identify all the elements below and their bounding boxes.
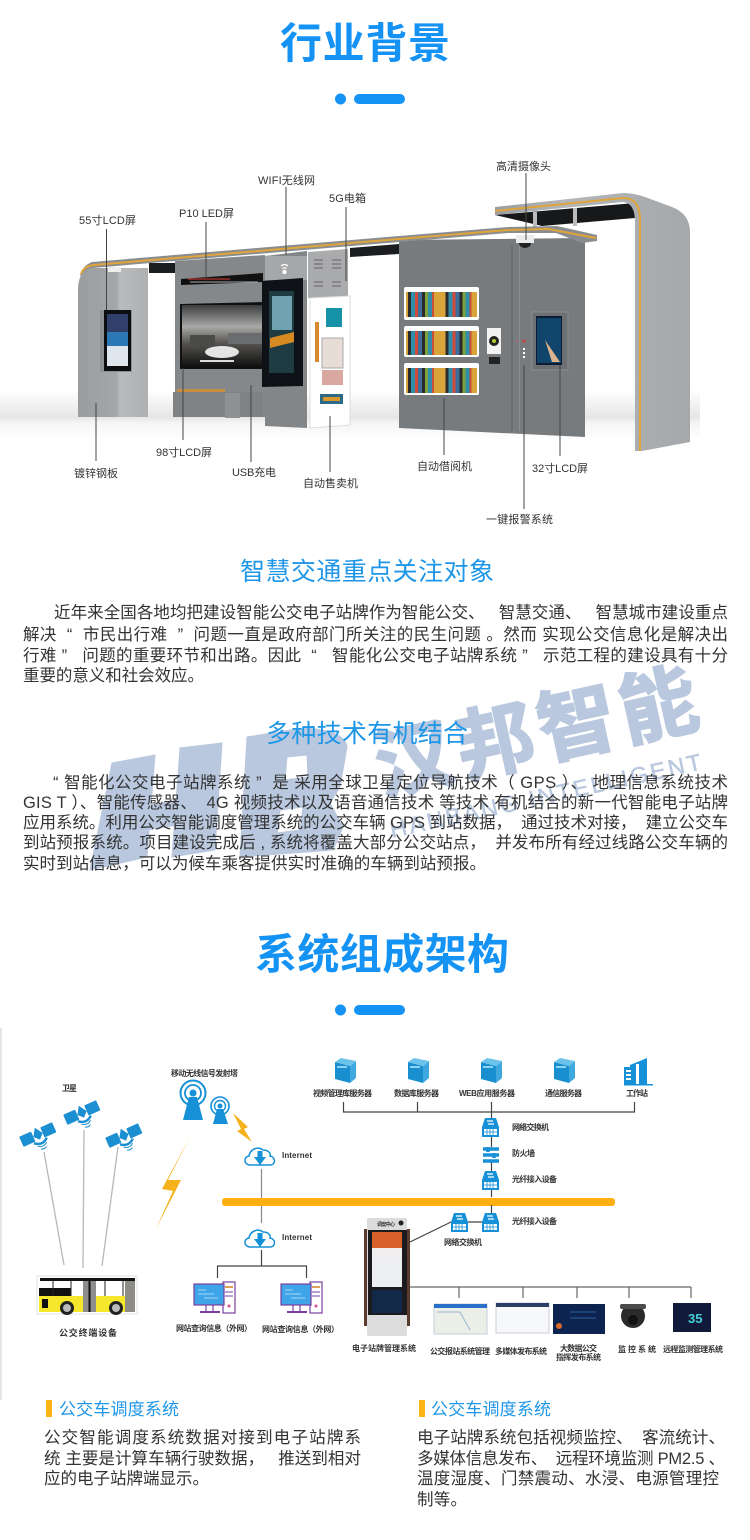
callout: 自动借阅机: 自动借阅机: [417, 459, 472, 473]
lightning bolts: [156, 1113, 252, 1229]
icon: workstation: [624, 1058, 653, 1086]
bench: [173, 389, 263, 418]
callout: 32寸LCD屏: [532, 365, 588, 475]
label: 工作站: 工作站: [626, 1088, 648, 1098]
text block: paragraph 1: 重要的意义和社会效应。: [23, 666, 204, 685]
portrait LCD: [262, 278, 303, 387]
description: 多媒体信息发布、 远程环境监测 PM2.5 、: [417, 1449, 725, 1468]
description: 电子站牌系统包括视频监控、 客流统计、: [417, 1428, 725, 1447]
callout: WIFI无线网: [258, 173, 315, 255]
shelter callouts: [74, 159, 588, 526]
callout: 98寸LCD屏: 98寸LCD屏: [156, 445, 212, 459]
text block: paragraph 2: 实时到站信息，可以为候车乘客提供实时准确的车辆到站预报。: [23, 854, 486, 873]
title: 系统组成架构: 系统组成架构: [255, 931, 509, 978]
alarm buttons: [516, 340, 526, 358]
callout: USB充电: USB充电: [232, 465, 276, 479]
callout: 98寸LCD屏: [156, 368, 212, 459]
roof undersides: [149, 244, 399, 273]
text block: paragraph 2: GIS T ）、智能传感器、 4G 视频技术以及语音通信技术 等技术 有机结合的新一代智能电子站牌: [23, 793, 728, 812]
callout: 5G电箱: [329, 191, 366, 281]
internet cloud 1: [245, 1148, 312, 1165]
callout: 高清摄像头: 高清摄像头: [496, 159, 551, 173]
fibre access device lower: [482, 1213, 557, 1232]
callout: 55寸LCD屏: 55寸LCD屏: [79, 213, 136, 227]
description: [44, 1428, 361, 1488]
subsystem labels: 指挥发布系统: [556, 1352, 601, 1362]
P10 LED strip: [181, 273, 263, 285]
servers: 视频管理库服务器: [313, 1088, 372, 1098]
subsystem labels: 公交报站系统管理: [430, 1346, 490, 1356]
signal towers: [180, 1080, 229, 1124]
callout: 32寸LCD屏: 32寸LCD屏: [532, 461, 588, 475]
kiosk subsystem wiring: [410, 1287, 691, 1298]
screen: multimedia publishing: [496, 1303, 549, 1333]
accent bar: [419, 1400, 425, 1417]
floor reflection: [0, 390, 700, 440]
description: 温度湿度、门禁震动、水浸、电源管理控: [417, 1469, 719, 1488]
title decoration: [335, 1004, 405, 1016]
servers: 通信服务器: [545, 1088, 582, 1098]
watermark: [90, 655, 706, 870]
screen: big data: [553, 1304, 605, 1334]
panel: right dispatch system: [417, 1400, 725, 1509]
computers: 网站查询信息（外网）: [262, 1324, 339, 1334]
subsystem labels: 多媒体发布系统: [495, 1346, 547, 1356]
callout: 自动售卖机: [303, 416, 358, 490]
computers: 网站查询信息（外网）: [176, 1323, 252, 1333]
electronic stop sign kiosk: 调度中心: [377, 1221, 395, 1228]
55 inch LCD: [100, 310, 132, 372]
accent bar: [46, 1400, 52, 1417]
QR panel: [487, 328, 501, 364]
heading: 公交车调度系统: [431, 1400, 551, 1419]
text block: paragraph 2: 到站预报系统。项目建设完成后 , 系统将覆盖大部分公交站点， 并发布所有经过线路公交车辆的: [23, 833, 728, 852]
text block: paragraph 2: “ 智能化公交电子站牌系统 ” 是 采用全球卫星定位导航技术（ GPS ）、 地理信息系统技术: [53, 773, 728, 792]
backbone bar: [222, 1198, 615, 1206]
network switch lower: [410, 1213, 482, 1247]
network switch: 网络交换机: [512, 1122, 549, 1132]
callout: 自动售卖机: 自动售卖机: [303, 476, 358, 490]
callout: 镀锌钢板: [74, 403, 118, 480]
fibre access device upper: [482, 1171, 557, 1190]
subsystem labels: 监控系统: [618, 1344, 656, 1354]
bus shelter illustration: [0, 193, 700, 451]
callout: 55寸LCD屏: [79, 213, 136, 310]
electronic stop sign kiosk: [364, 1218, 410, 1336]
text block: paragraph 2: [23, 773, 728, 873]
subsystem labels: 电子站牌管理系统: [352, 1343, 416, 1353]
right block: book borrowing machine: [399, 238, 585, 437]
servers: [313, 1058, 582, 1098]
center column: [262, 251, 307, 428]
servers: WEB应用服务器: [459, 1088, 515, 1098]
description: 统 主要是计算车辆行驶数据， 推送到相对: [44, 1449, 361, 1468]
description: 应的电子站牌端显示。: [44, 1469, 209, 1488]
description: 制等。: [417, 1490, 467, 1509]
screen: remote monitoring: [673, 1303, 711, 1332]
screen: remote monitoring: 35: [688, 1311, 702, 1326]
5G box: [308, 249, 348, 298]
callout: WIFI无线网: WIFI无线网: [258, 173, 315, 187]
screen: bus station management: [434, 1304, 487, 1334]
bus: [37, 1276, 137, 1315]
book shelves: [404, 287, 479, 395]
panel: left dispatch system: [44, 1400, 361, 1488]
network switch: [482, 1118, 549, 1137]
text block: paragraph 1: [23, 603, 728, 685]
watermark: 汉邦智能: [367, 655, 706, 812]
text block: paragraph 1: 解决 “ 市民出行难 ” 问题一直是政府部门所关注的民生问题 。然而 实现公交信息化是解决出: [23, 625, 728, 644]
heading: 智慧交通重点关注对象: 智慧交通重点关注对象: [240, 558, 494, 586]
subsystem labels: 大数据公交: [560, 1343, 597, 1353]
description: [417, 1428, 725, 1509]
wifi icon: [281, 264, 288, 274]
servers: 数据库服务器: [394, 1088, 439, 1098]
left camera: [108, 267, 121, 272]
callout: USB充电: [232, 385, 276, 479]
fibre access device lower: 光纤接入设备: [512, 1216, 557, 1226]
callout: P10 LED屏: [179, 207, 234, 278]
callout: 自动借阅机: [417, 398, 472, 473]
callout: 5G电箱: 5G电箱: [329, 191, 366, 205]
fibre access device upper: 光纤接入设备: [512, 1174, 557, 1184]
internet cloud 2: [245, 1230, 312, 1247]
subsystem labels: 远程监测管理系统: [663, 1344, 723, 1354]
callout: 镀锌钢板: 镀锌钢板: [74, 466, 118, 480]
server tree wiring: [344, 1102, 634, 1213]
satellites: [18, 1084, 147, 1268]
camera: [516, 235, 534, 248]
text block: paragraph 2: 应用系统。利用公交智能调度管理系统的公交车辆 GPS 到站数据， 通过技术对接， 建立公交车: [23, 813, 728, 832]
satellites: 卫星: [62, 1084, 77, 1093]
label: 公交终端设备: 公交终端设备: [59, 1327, 117, 1338]
wiring left: [260, 1169, 262, 1223]
title decoration: [335, 94, 405, 104]
rear panel: [175, 255, 265, 417]
description: 公交智能调度系统数据对接到电子站牌系: [44, 1428, 361, 1447]
icon: dome camera: [620, 1304, 646, 1328]
callout: 高清摄像头: [496, 159, 551, 240]
subsystem labels: [352, 1343, 723, 1362]
text block: paragraph 1: 近年来全国各地均把建设智能公交电子站牌作为智能公交、 智慧交通、 智慧城市建设重点: [54, 603, 728, 622]
label: 移动无线信号发射塔: 移动无线信号发射塔: [171, 1068, 238, 1078]
firewall: 防火墙: [512, 1148, 535, 1158]
internet cloud 1: Internet: [282, 1151, 312, 1160]
98 inch LCD: [180, 302, 263, 369]
title: 行业背景: 行业背景: [280, 20, 450, 67]
callout: 一键报警系统: 一键报警系统: [486, 512, 553, 526]
main roof: [80, 226, 597, 276]
heading: 多种技术有机结合: 多种技术有机结合: [266, 720, 468, 748]
firewall: [483, 1147, 535, 1161]
system architecture diagram: [1, 1028, 723, 1400]
vending machine: [310, 296, 350, 428]
internet cloud 2: Internet: [282, 1233, 312, 1242]
callout: P10 LED屏: P10 LED屏: [179, 207, 234, 220]
computers: [176, 1282, 339, 1334]
text block: paragraph 1: 行难 ” 问题的重要环节和出路。因此 “ 智能化公交电子站牌系统 ” 示范工程的建设具有十分: [23, 646, 728, 665]
heading: 公交车调度系统: [59, 1400, 179, 1419]
right arch: [495, 193, 690, 451]
network switch lower: 网络交换机: [444, 1237, 482, 1247]
left pillar: [78, 268, 148, 417]
32 inch LCD: [532, 312, 568, 370]
watermark: HANBANG INTELLIGENT: [387, 749, 704, 843]
